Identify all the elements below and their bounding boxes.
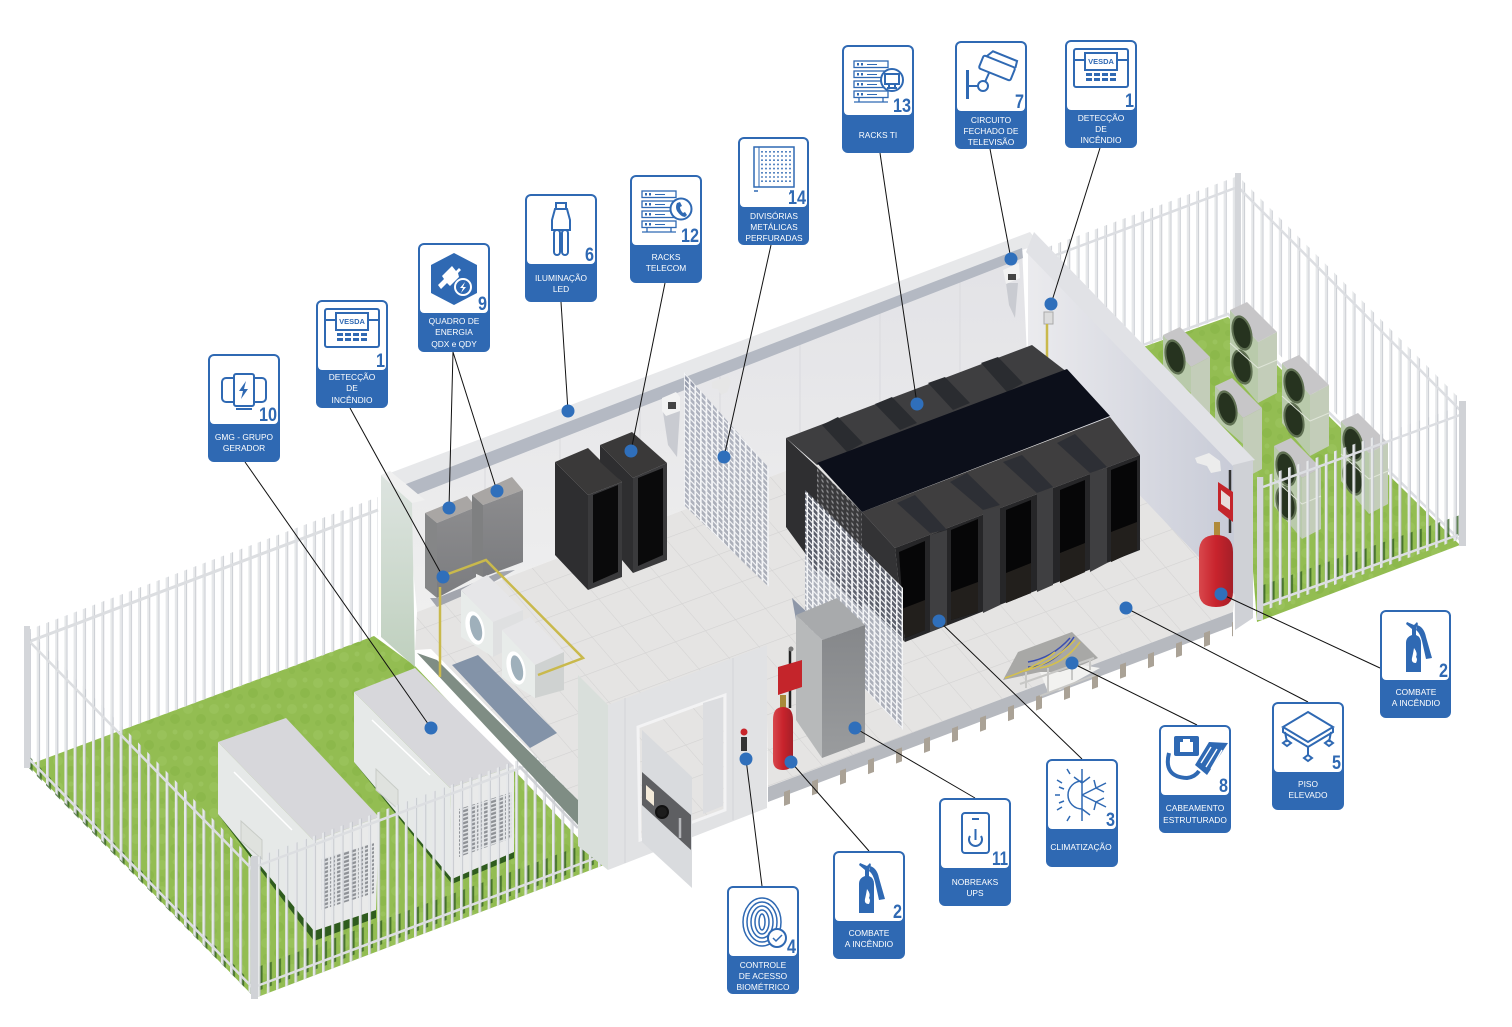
raised floor supports <box>768 622 1233 812</box>
post: right yard corner <box>1235 173 1241 313</box>
card 1: detecção de incêndio right <box>1065 40 1137 148</box>
card 9: quadro de energia: 9 <box>478 294 487 315</box>
icon: extinguisher <box>1406 622 1432 672</box>
card 8: cabeamento: ESTRUTURADO <box>1163 815 1227 825</box>
icon: sun and snowflake <box>1055 769 1106 821</box>
card 5: piso elevado <box>1272 702 1344 810</box>
condenser unit stack <box>1339 413 1388 514</box>
camera back corner shadow <box>1006 283 1018 318</box>
card 2: combate bottom: A INCÊNDIO <box>845 939 894 949</box>
card 2: combate bottom: COMBATE <box>849 928 890 938</box>
card 7: CFTV: FECHADO DE <box>964 126 1019 136</box>
fence: left yard front <box>255 728 604 998</box>
card 14: divisórias: PERFURADAS <box>745 233 803 243</box>
icon: VESDA panel: VESDA <box>339 317 366 326</box>
fence: left yard side <box>28 630 255 998</box>
wall cap: back <box>390 232 1040 484</box>
card 5: piso elevado: ELEVADO <box>1289 790 1328 800</box>
right wall end post <box>1233 460 1253 630</box>
telecom rack 2 <box>600 432 667 573</box>
icon: generator <box>222 374 266 409</box>
card 1: detecção de incêndio right: DE <box>1095 124 1107 134</box>
left yard <box>24 497 604 999</box>
card 11: nobreaks <box>939 798 1011 906</box>
floor edge strip <box>417 653 578 825</box>
post: left yard back corner <box>24 626 30 768</box>
card 1: detecção de incêndio left: DETECÇÃO <box>329 372 376 382</box>
card 2: combate right <box>1380 610 1451 718</box>
condenser unit stack <box>1228 302 1277 403</box>
generator 2 <box>218 718 379 941</box>
camera right wall <box>1195 453 1221 473</box>
card 7: CFTV: 7 <box>1015 92 1024 113</box>
card 4: controle de acesso <box>727 886 799 994</box>
card 10: GMG: GERADOR <box>223 443 265 453</box>
card 7: CFTV <box>955 41 1027 149</box>
door lock plate <box>642 772 691 850</box>
condenser unit stack <box>1272 438 1321 539</box>
UPS cabinet <box>796 598 865 758</box>
card 3: climatização: CLIMATIZAÇÃO <box>1050 842 1112 852</box>
card 8: cabeamento: CABEAMENTO <box>1166 803 1225 813</box>
card 2: combate right: A INCÊNDIO <box>1392 698 1441 708</box>
icon: VESDA panel: VESDA <box>1088 57 1115 66</box>
icon: LED lamp <box>552 203 570 255</box>
icon: extinguisher <box>859 863 885 913</box>
card 9: quadro de energia: QUADRO DE <box>429 316 480 326</box>
card 5: piso elevado: PISO <box>1298 779 1318 789</box>
card 4: controle de acesso: DE ACESSO <box>739 971 788 981</box>
card 11: nobreaks: UPS <box>966 888 984 898</box>
icon: fingerprint <box>743 898 786 947</box>
condenser unit <box>1161 327 1210 428</box>
floor shadow under condensers <box>452 655 557 748</box>
left wall slab <box>381 475 415 667</box>
generator 1 <box>354 668 514 884</box>
card 9: quadro de energia <box>418 243 490 352</box>
card 13: racks TI: RACKS TI <box>859 130 897 140</box>
card 6: iluminação LED: LED <box>553 284 569 294</box>
rail: yard to floor <box>519 766 578 828</box>
card 12: racks telecom: TELECOM <box>646 263 686 273</box>
card 1: detecção de incêndio right: DETECÇÃO <box>1078 113 1125 123</box>
floor cable opening <box>1003 632 1100 696</box>
door leaf <box>642 730 692 888</box>
card 3: climatização: 3 <box>1106 810 1115 831</box>
card 7: CFTV: TELEVISÃO <box>968 137 1015 147</box>
icon: UPS power <box>962 813 989 853</box>
card 11: nobreaks: 11 <box>992 849 1008 870</box>
fire detector with pipe <box>1044 312 1053 362</box>
yellow pipe <box>440 560 583 677</box>
fence: right yard front <box>1260 405 1463 612</box>
icon: network cable <box>1168 736 1228 778</box>
condenser unit stack <box>1280 355 1329 456</box>
access button <box>740 728 748 751</box>
card 6: iluminação LED: 6 <box>585 245 594 266</box>
fence rails: right yard <box>1048 187 1463 540</box>
card 11: nobreaks: NOBREAKS <box>952 877 999 887</box>
fence shadow: front edge <box>255 838 601 992</box>
card 12: racks telecom <box>630 175 702 283</box>
card 8: cabeamento <box>1159 725 1231 833</box>
floor front edge <box>768 612 1233 802</box>
fence: right yard side <box>1238 176 1463 545</box>
perforated partition back <box>684 372 769 587</box>
card 1: detecção de incêndio right: INCÊNDIO <box>1081 135 1122 145</box>
icon: hexagon plug <box>431 253 477 305</box>
card 13: racks TI: 13 <box>893 96 911 117</box>
right wall <box>1028 245 1235 600</box>
fence shadow: left side edge <box>28 755 255 998</box>
post: right yard outer corner <box>1459 401 1466 546</box>
card 4: controle de acesso: BIOMÉTRICO <box>736 982 790 992</box>
shadow: under panels <box>430 570 515 607</box>
card 14: divisórias: 14 <box>788 188 806 209</box>
door handle <box>679 818 681 838</box>
card 10: GMG: 10 <box>259 405 277 426</box>
card 8: cabeamento: 8 <box>1219 776 1228 797</box>
floor <box>415 378 1235 800</box>
racks front row <box>862 417 1140 642</box>
post: left yard front corner <box>251 856 258 999</box>
indoor condenser 1 <box>461 575 523 657</box>
fence shadow: right yard <box>1263 515 1460 605</box>
fence: right yard back <box>1048 176 1238 382</box>
camera back corner <box>1003 263 1020 284</box>
condenser unit <box>1213 378 1262 479</box>
fire extinguisher system front <box>773 646 802 770</box>
back wall <box>405 247 1028 612</box>
grass: left yard <box>28 636 604 998</box>
grass: right yard <box>1143 317 1460 622</box>
card 10: GMG: GMG - GRUPO <box>215 432 274 442</box>
card 2: combate right: COMBATE <box>1396 687 1437 697</box>
card 1: detecção de incêndio left: 1 <box>376 351 385 372</box>
right yard <box>1048 173 1466 622</box>
slab top <box>381 471 425 503</box>
card 13: racks TI <box>842 45 914 153</box>
card 1: detecção de incêndio left: INCÊNDIO <box>332 395 373 405</box>
icon: security camera <box>966 49 1018 99</box>
energy panel QDY <box>472 477 523 577</box>
card 14: divisórias: DIVISÓRIAS <box>750 211 798 221</box>
card 14: divisórias <box>738 137 809 245</box>
card 2: combate right: 2 <box>1439 661 1448 682</box>
front door block <box>578 645 767 888</box>
card 6: iluminação LED <box>525 194 597 302</box>
fence: left yard back <box>28 497 378 765</box>
wall shadow: back <box>406 248 1023 498</box>
camera shadow <box>663 410 680 457</box>
card 6: iluminação LED: ILUMINAÇÃO <box>535 273 588 283</box>
leader lines <box>245 148 1380 886</box>
fence rails: left yard <box>28 640 601 990</box>
room <box>381 232 1255 888</box>
card 5: piso elevado: 5 <box>1332 753 1341 774</box>
door jamb <box>703 697 723 814</box>
card 9: quadro de energia: QDX e QDY <box>431 339 477 349</box>
perforated partition front <box>805 490 903 730</box>
racks side perforated <box>817 467 862 610</box>
indoor condenser 2 <box>502 617 564 698</box>
card 12: racks telecom: 12 <box>681 226 699 247</box>
wall cap: right <box>1026 232 1255 466</box>
icon: perforated partition <box>754 147 794 191</box>
card 9: quadro de energia: ENERGIA <box>435 327 473 337</box>
card 2: combate bottom: 2 <box>893 902 902 923</box>
post: right yard gate <box>1257 477 1263 620</box>
card 4: controle de acesso: 4 <box>787 937 796 958</box>
wall seams <box>485 270 960 590</box>
telecom rack 1 <box>555 448 622 590</box>
fence rails: right yard front <box>1263 415 1460 605</box>
fire extinguisher system right <box>1199 470 1233 607</box>
icon: server with monitor <box>854 61 903 102</box>
door opening <box>638 695 725 840</box>
energy panel QDX <box>425 496 476 598</box>
camera <box>712 376 731 395</box>
fence rail: left yard back <box>28 510 378 642</box>
card 12: racks telecom: RACKS <box>652 252 681 262</box>
racks back row <box>786 345 1067 575</box>
icon: server with phone <box>642 191 692 232</box>
card 4: controle de acesso: CONTROLE <box>740 960 787 970</box>
card 2: combate bottom <box>833 851 905 959</box>
card 7: CFTV: CIRCUITO <box>971 115 1012 125</box>
card 14: divisórias: METÁLICAS <box>750 222 798 232</box>
marker dots <box>424 252 1228 768</box>
card 10: GMG <box>208 354 280 462</box>
card 3: climatização <box>1046 759 1118 867</box>
door sign <box>646 785 654 806</box>
card 1: detecção de incêndio left <box>316 300 388 408</box>
UPS shadow <box>792 598 810 620</box>
icon: raised floor <box>1283 712 1333 761</box>
racks top plate <box>817 369 1110 512</box>
card 1: detecção de incêndio right: 1 <box>1125 91 1134 112</box>
card 1: detecção de incêndio left: DE <box>346 383 358 393</box>
camera <box>662 392 680 416</box>
door wheel <box>656 806 668 818</box>
